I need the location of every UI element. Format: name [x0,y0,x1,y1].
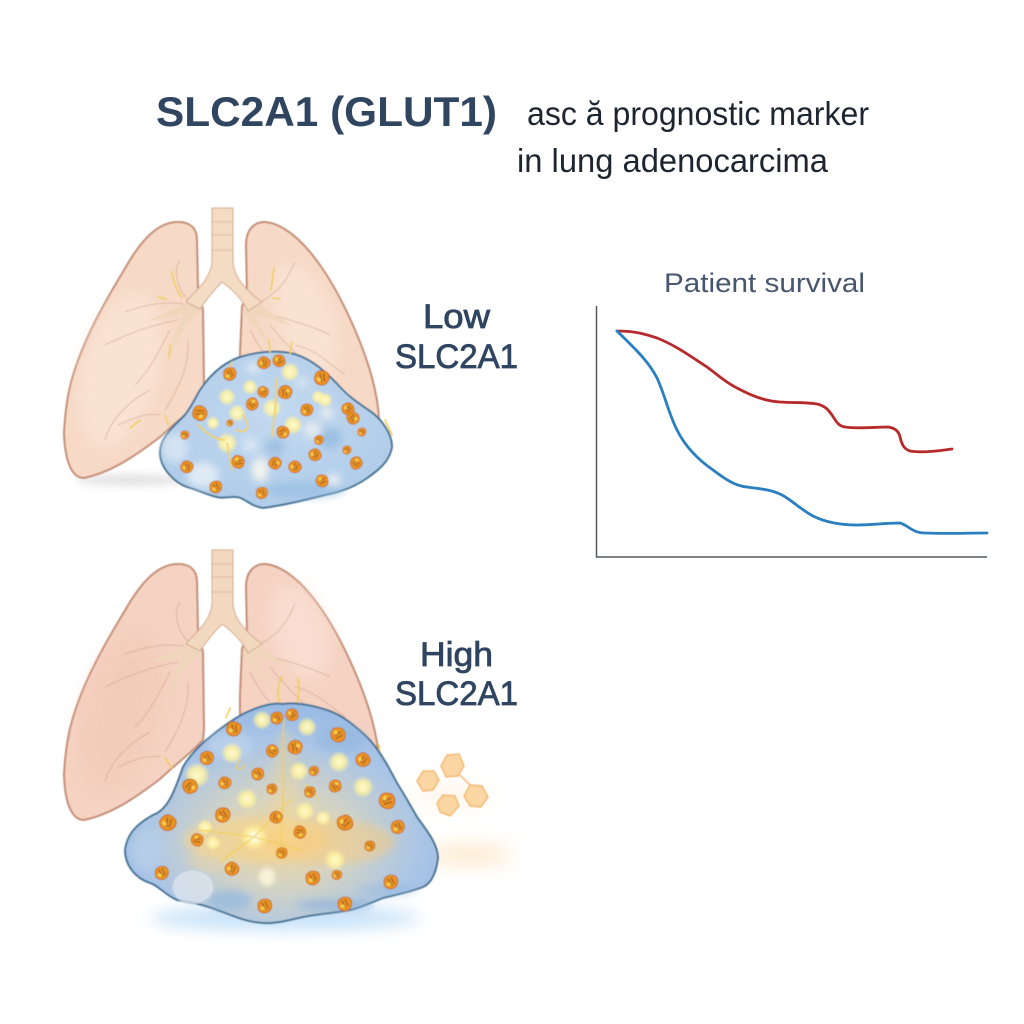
tumor [160,340,392,508]
lungs [63,208,379,478]
label: high SLC2A1 [395,636,518,713]
chart title: Patient survival [664,268,865,298]
pale cell [259,868,275,886]
title: in lung adenocarcima [517,142,829,179]
survival chart [596,306,987,557]
label: high SLC2A1: SLC2A1 [395,675,518,713]
glow: orange beside tumor [410,787,514,864]
label: low SLC2A1 [395,298,518,376]
title: SLC2A1 (GLUT1) [156,88,497,135]
yellow strands [165,340,392,470]
icon: glucose hexagons [417,754,488,816]
orange cells [179,354,366,499]
label: low SLC2A1: Low [423,298,490,336]
label: low SLC2A1: SLC2A1 [395,338,518,376]
lung shadow [75,474,185,486]
glow: blue under tumor [150,906,420,930]
glowing spots [184,710,374,871]
tumor light patches [162,362,345,498]
lungs [63,550,379,820]
glowing spots [206,362,333,454]
tumor light patches [132,726,418,911]
yellow strands [200,720,318,862]
central starburst [249,832,259,842]
panel: high SLC2A1 lungs and tumor [63,550,514,930]
axes [596,306,987,557]
title: asc ă prognostic marker [527,95,869,132]
orange cells [155,708,404,913]
pale sphere [172,870,214,904]
curve: low SLC2A1 (red) [617,331,952,452]
tumor [125,703,438,923]
title [156,88,869,179]
label: high SLC2A1: High [420,636,493,674]
panel: low SLC2A1 lungs and tumor [63,208,392,508]
curve: high SLC2A1 (blue) [617,331,987,533]
yellow strands above tumor [165,676,380,768]
